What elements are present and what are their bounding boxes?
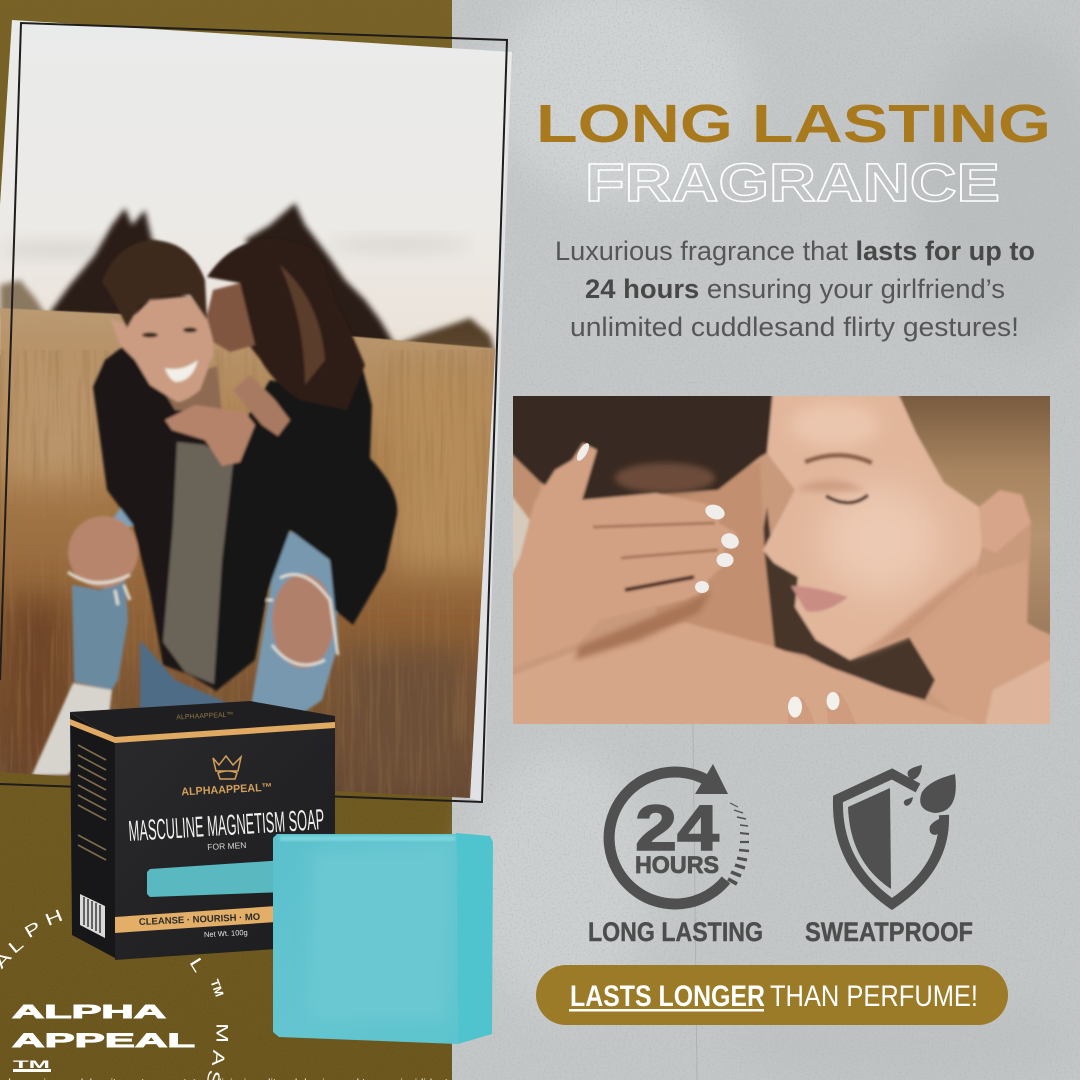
small drop low — [930, 817, 945, 835]
right knee skin — [272, 574, 334, 668]
callout regular text: THAN PERFUME! — [770, 980, 978, 1013]
number 24: 24 — [635, 792, 719, 864]
pill background — [536, 965, 1008, 1025]
woman's hair — [207, 239, 365, 410]
background: grey concrete panel — [452, 0, 1080, 1080]
woman's cheek highlight — [820, 485, 940, 595]
woman's forearm — [165, 405, 255, 466]
background: olive panel — [0, 0, 452, 1080]
woman's face — [763, 380, 982, 660]
soap front face — [273, 834, 458, 1044]
box top face — [70, 701, 335, 741]
circular brand text: M — [213, 1023, 231, 1043]
soap side face — [456, 833, 493, 1044]
line 3: unlimited cuddlesand flirty gestures! — [570, 312, 1019, 342]
left jeans — [72, 580, 128, 690]
right knee frayed denim — [265, 574, 338, 665]
dark hair behind — [755, 507, 935, 700]
circular brand text: TM — [207, 977, 227, 999]
woman's black jacket — [215, 370, 397, 692]
photo scene — [513, 396, 1050, 724]
paper strip beside photo — [468, 52, 512, 802]
callout underline — [569, 1009, 764, 1012]
shield outline — [838, 774, 944, 904]
body paragraph — [555, 236, 1035, 342]
line 1: Luxurious fragrance that lasts for up to — [555, 236, 1035, 266]
infographic canvas: MASCULINE MAGNETISM SOAP — [128, 804, 325, 848]
man's smile — [165, 360, 198, 382]
box side face — [70, 712, 115, 958]
man's eyes — [142, 328, 197, 338]
brand wordmark — [12, 1002, 196, 1072]
ring arrow — [609, 772, 726, 904]
man's neck — [656, 464, 776, 648]
small drop mid — [904, 797, 913, 806]
grey shirt — [163, 442, 233, 684]
for men: FOR MEN — [207, 840, 247, 852]
left light backdrop — [513, 495, 531, 575]
woman's shoulder — [982, 652, 1065, 740]
net weight: Net Wt. 100g — [204, 928, 248, 939]
top gold band — [70, 719, 335, 743]
callout bold text: LASTS LONGER — [570, 980, 765, 1013]
woman's neck — [912, 563, 1050, 724]
brand name: ALPHAAPPEAL™ — [181, 782, 273, 798]
circular brand text: L — [5, 935, 27, 957]
icon: sweatproof shield — [838, 765, 956, 904]
product box — [70, 701, 335, 960]
woman's eye — [826, 495, 868, 503]
alpha: ALPHA — [12, 1002, 166, 1022]
photo base — [513, 452, 1050, 714]
man's face — [110, 296, 213, 402]
left thigh jeans — [112, 506, 135, 528]
barcode — [80, 894, 105, 938]
man's hair — [102, 240, 207, 328]
distant clouds — [0, 238, 470, 258]
man's ear — [500, 445, 541, 523]
circular brand text: A — [208, 1049, 228, 1067]
concrete texture — [452, 0, 1080, 1080]
woman's eyebrow — [805, 455, 872, 463]
half shield fill — [848, 788, 891, 889]
clock tick marks — [728, 803, 749, 884]
appeal: APPEAL — [12, 1031, 196, 1052]
woman's hair highlight — [280, 265, 325, 385]
label: sweatproof: SWEATPROOF — [805, 917, 973, 947]
woman's ear — [979, 490, 1031, 553]
circular brand text: H — [42, 906, 66, 930]
photo: couple in field — [0, 15, 515, 810]
title: fragrance outline: FRAGRANCE — [585, 153, 1000, 213]
man's hair — [500, 380, 774, 500]
finger gap — [625, 577, 694, 590]
circular brand text: P — [21, 918, 45, 942]
large drop — [920, 774, 956, 813]
bottom fingers — [788, 692, 856, 724]
teal window — [147, 860, 285, 897]
hours word: HOURS — [635, 852, 719, 879]
arrow head — [695, 764, 728, 794]
label: long lasting: LONG LASTING — [588, 917, 763, 947]
callout pill — [536, 965, 1008, 1025]
soap inner glow — [312, 850, 447, 1020]
lower gold band — [115, 902, 335, 933]
woman's second hand — [233, 375, 290, 436]
left boot — [32, 683, 112, 775]
band text: CLEANSE · NOURISH · MO — [139, 912, 260, 928]
field grass tone — [0, 350, 500, 790]
finger shadows — [593, 523, 718, 558]
couple figure — [32, 239, 397, 775]
line 2: 24 hours ensuring your girlfriend’s — [585, 274, 1005, 304]
grass streaks — [0, 350, 515, 800]
box front face — [115, 726, 335, 960]
title: long lasting: LONG LASTING — [536, 94, 1051, 154]
forehead highlight — [790, 403, 880, 447]
woman's face — [207, 283, 255, 352]
side label text — [78, 745, 106, 860]
woman's hair — [898, 396, 1050, 635]
small drop top — [908, 765, 922, 780]
soap top highlight — [280, 836, 455, 841]
left knee frayed denim — [68, 572, 130, 605]
hand cast shadow — [575, 590, 712, 660]
wheat field — [0, 308, 515, 810]
circular brand text — [0, 906, 231, 1080]
crown logo — [213, 756, 241, 779]
man's black puffer jacket — [93, 345, 240, 690]
trees on horizon — [0, 203, 495, 352]
left knee skin — [68, 516, 138, 588]
sky — [0, 15, 515, 355]
woman's eye shadow — [795, 480, 865, 492]
jaw shadow — [850, 560, 982, 660]
olive grain — [0, 0, 452, 1080]
circular brand text: L — [185, 954, 209, 976]
hair lighter nape — [615, 463, 715, 493]
woman's lips — [791, 586, 848, 612]
icon: 24 hours clock — [609, 764, 749, 904]
trademark: TM — [13, 1059, 50, 1071]
man's back — [513, 622, 964, 724]
right jeans — [250, 530, 338, 715]
fingernails — [575, 441, 741, 593]
photo frame outline — [0, 23, 507, 802]
man's lower jeans — [138, 640, 229, 708]
soap bar — [273, 833, 493, 1044]
photo: intimate couple — [513, 396, 1050, 724]
box top print: ALPHAAPPEAL™ — [176, 712, 234, 721]
woman's hand — [500, 443, 739, 675]
man's neck — [165, 366, 222, 412]
